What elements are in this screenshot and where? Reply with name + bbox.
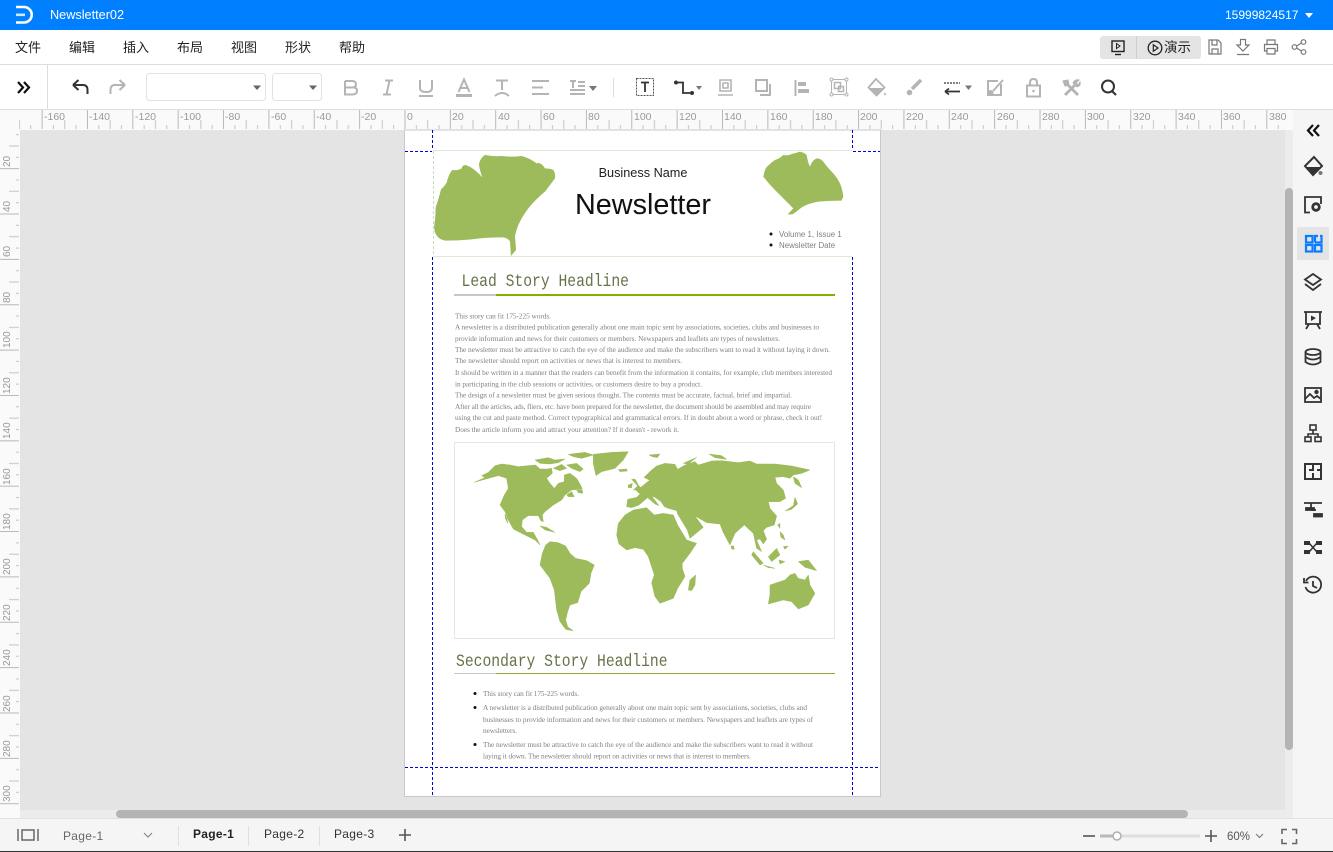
toolbar divider: [48, 65, 614, 109]
icon: add page: [399, 829, 411, 841]
icon: fill bucket: [1305, 157, 1322, 175]
ruler labels: 300: [2, 785, 13, 802]
ruler labels: 160: [770, 111, 788, 123]
uk and ireland: [628, 479, 642, 490]
lead story body: This story can fit 175-225 words.: [455, 311, 551, 320]
lead story body: Does the article inform you and attract your attention? If it doesn't - rework it.: [455, 425, 679, 434]
icon: align shapes: [796, 80, 809, 96]
issue details: Volume 1, Issue 1: [779, 230, 842, 239]
tab: page 2: Page-2: [264, 827, 304, 841]
ruler labels: 220: [906, 111, 924, 123]
iceland: [618, 469, 627, 472]
icon: text box: [636, 78, 654, 96]
icon: symbol library: [1306, 236, 1322, 252]
document name: Newsletter02: [50, 8, 124, 22]
tab divider: [248, 826, 249, 846]
sumatra and java: [752, 552, 775, 568]
icon: line spacing: [570, 81, 597, 94]
ruler labels: 360: [1223, 111, 1241, 123]
scrollbar thumb: [116, 810, 1188, 818]
header band: [433, 150, 852, 256]
icon: mind map: [1304, 541, 1322, 554]
ruler labels: 280: [1042, 111, 1060, 123]
icon: connector: [674, 80, 702, 95]
icon: tools: [1063, 80, 1080, 95]
ruler labels: 80: [588, 111, 600, 123]
icon: group: [830, 78, 848, 96]
ruler labels: 200: [860, 111, 878, 123]
icon: floor plan: [1305, 464, 1321, 479]
ruler labels: 140: [2, 422, 13, 439]
horizontal scrollbar: [20, 810, 1285, 818]
icon: undo: [73, 80, 88, 94]
menu: view: 视图: [231, 40, 257, 55]
left ruler: [0, 130, 20, 818]
ruler labels: -100: [180, 111, 201, 123]
title bar: [0, 0, 1333, 30]
icon: page settings: [1305, 197, 1321, 212]
ruler labels: 60: [2, 245, 13, 257]
madagascar: [688, 575, 696, 591]
menu: file: 文件: [15, 40, 41, 55]
ruler labels: -80: [225, 111, 240, 123]
icon: font colour: [456, 80, 472, 97]
icon: collapse chevrons: [1308, 125, 1319, 136]
icon: redo: [110, 80, 125, 94]
ruler labels: 100: [2, 331, 13, 348]
lead story body: After all the articles, ads, fliers, etc. have been prepared for the newsletter, the document should be assembled and may require: [455, 402, 811, 411]
ruler labels: 40: [2, 200, 13, 212]
ruler labels: 120: [679, 111, 697, 123]
ruler labels: 260: [2, 695, 13, 712]
ruler labels: 140: [724, 111, 742, 123]
ruler labels: 20: [452, 111, 464, 123]
top ruler: [0, 110, 1293, 130]
icon: zoom in: [1205, 830, 1217, 842]
tab: page 3: Page-3: [334, 827, 374, 841]
font size select: [272, 74, 322, 100]
icon: fullscreen: [1282, 830, 1296, 844]
secondary headline: Secondary Story Headline: [456, 652, 668, 671]
lead story body: provide information and news for their customers or members. Newspapers and leaflets are types of newsletters.: [455, 334, 780, 343]
south america: [540, 542, 594, 631]
zoom percentage: 60%: [1227, 831, 1250, 843]
icon: text style: [495, 80, 509, 96]
zoom slider: [1100, 832, 1200, 840]
menu: help: 帮助: [339, 40, 365, 55]
icon: zoom out: [1083, 835, 1095, 837]
new guinea: [798, 560, 817, 571]
menu bar: [0, 30, 1333, 65]
icon: database: [1306, 349, 1320, 364]
tab divider: [178, 826, 179, 846]
baja california: [505, 514, 508, 523]
lead headline rule: [454, 294, 835, 296]
borneo and sulawesi: [768, 546, 788, 564]
icon: org chart: [1305, 425, 1321, 442]
japan and sakhalin: [785, 477, 802, 511]
scrollbar thumb: [1285, 188, 1293, 750]
tab divider: [319, 826, 320, 846]
lead story body: The newsletter must be attractive to catch the eye of the audience and make the subscribers want to read it without laying it down.: [455, 345, 830, 354]
ruler labels: 120: [2, 377, 13, 394]
ruler labels: -60: [271, 111, 286, 123]
world map: [474, 452, 817, 631]
icon: app logo: [16, 6, 34, 24]
issue details: [770, 230, 842, 250]
icon: align: [532, 81, 549, 94]
icon: page panel: [17, 829, 39, 841]
icon: fill bucket: [868, 79, 886, 96]
icon: line style: [944, 83, 972, 94]
ruler labels: 260: [997, 111, 1015, 123]
toolbar icons: [17, 65, 1117, 109]
africa: [617, 508, 697, 603]
ruler labels: -20: [361, 111, 376, 123]
toolbar: [0, 65, 1333, 110]
eurasia: [627, 461, 810, 552]
issue details: Newsletter Date: [779, 241, 836, 250]
ruler labels: 200: [2, 558, 13, 575]
zoom controls: [1083, 828, 1298, 844]
greenland: [593, 452, 628, 476]
icon: duplicate: [756, 80, 770, 95]
secondary bullet list: businesses to provide information and news for their customers or members. Newspapers and leaflets are types of: [483, 715, 814, 724]
ruler labels: [2, 155, 13, 802]
secondary bullet list: This story can fit 175-225 words.: [483, 689, 579, 698]
icon: bold: [345, 81, 357, 94]
secondary bullet list: newsletters.: [483, 726, 517, 735]
button divider: [1136, 36, 1137, 59]
icon: layers: [1305, 274, 1321, 290]
secondary bullet list: [474, 689, 814, 760]
ruler labels: -40: [316, 111, 331, 123]
icon: italic: [383, 80, 393, 94]
ruler labels: 40: [498, 111, 510, 123]
icon: underline: [419, 80, 433, 96]
icon: right ginkgo leaf: [763, 152, 843, 214]
ruler labels: -160: [44, 111, 65, 123]
presentation button group: [1100, 36, 1201, 59]
ruler labels: 240: [951, 111, 969, 123]
ruler labels: 180: [815, 111, 833, 123]
taiwan and philippines: [778, 523, 785, 540]
sri lanka: [731, 546, 734, 549]
lead story body: A newsletter is a distributed publication generally about one main topic sent by associations, societies, clubs and businesses to: [455, 322, 819, 332]
icon: expand chevrons: [18, 82, 29, 93]
lead story body: The design of a newsletter must be given serious thought. The contents must be accurate, factual, brief and impartial.: [455, 390, 792, 400]
bottom edge: [0, 851, 1333, 852]
icon: slideshow screen: [1111, 40, 1125, 56]
icon: lock: [1027, 79, 1040, 96]
menu: edit: 编辑: [69, 40, 95, 55]
ruler labels: 380: [1269, 111, 1287, 123]
icon: share: [1292, 39, 1306, 55]
menu: shape: 形状: [285, 40, 311, 55]
icon: left ginkgo leaf: [434, 155, 555, 256]
page guide lines: [405, 130, 880, 796]
icon: print: [1264, 39, 1278, 55]
lead story body: The newsletter should report on activities or news that is interest to members.: [455, 356, 682, 365]
icon: selector chevron: [144, 832, 152, 838]
ruler labels: 0: [407, 111, 413, 123]
icon: image: [1305, 388, 1321, 402]
lead story body: in participating in the club sessions or activities, or customers desire to buy a product.: [455, 380, 702, 388]
lead headline: Lead Story Headline: [462, 272, 629, 291]
ruler labels: 300: [1087, 111, 1105, 123]
icon: account caret: [1305, 13, 1313, 18]
icon: edit shape: [988, 80, 1003, 96]
menu: layout: 布局: [177, 40, 203, 55]
page sheet: [404, 130, 880, 796]
ruler labels: 20: [2, 155, 13, 167]
icon: gantt: [1304, 503, 1322, 516]
icon: search: [1102, 80, 1116, 95]
ruler labels: 240: [2, 649, 13, 666]
sidebar icons: [1303, 124, 1324, 594]
current page selector: Page-1: [63, 829, 104, 843]
arctic islands: [535, 452, 593, 472]
secondary bullet list: The newsletter must be attractive to catch the eye of the audience and make the subscribers want to read it without: [483, 740, 813, 749]
lead story body: It should be written in a manner that the readers can benefit from the information it contains, for example, club members interested: [455, 368, 832, 377]
north america: [474, 464, 582, 545]
ruler labels: 340: [1178, 111, 1196, 123]
icon: save: [1208, 39, 1222, 55]
icon: bring to front: [718, 80, 733, 95]
newfoundland and nova scotia: [567, 490, 583, 497]
australia: [768, 573, 815, 609]
icon: history: [1304, 577, 1321, 593]
ruler labels: 100: [634, 111, 652, 123]
ruler labels: 160: [2, 468, 13, 485]
bottom bar: [0, 818, 1333, 851]
icon: play circle: [1148, 40, 1162, 56]
font family select: [146, 74, 266, 100]
cuba and caribbean: [540, 526, 555, 532]
menu: insert: 插入: [123, 40, 149, 55]
world map panel: [454, 442, 834, 638]
ruler labels: 320: [1133, 111, 1151, 123]
secondary headline rule: [454, 673, 835, 674]
present label: 演示: [1164, 40, 1191, 55]
active item highlight: [1297, 227, 1329, 260]
lead story body: using the cut and paste method. Correct typographical and grammatical errors. If in doubt about a word or phrase, check it out!: [455, 413, 822, 422]
ruler labels: 180: [2, 513, 13, 530]
right sidebar: [1293, 110, 1333, 818]
tab: page 1 active: Page-1: [193, 827, 234, 841]
lead story body: [455, 311, 832, 434]
secondary bullet list: laying it down. The newsletter should report on activities or news that is interest to members.: [483, 752, 751, 760]
newsletter title: Newsletter: [575, 189, 711, 221]
icon: download: [1236, 38, 1250, 56]
ruler labels: 220: [2, 604, 13, 621]
ruler labels: [44, 111, 1287, 123]
secondary bullet list: A newsletter is a distributed publication generally about one main topic sent by associations, societies, clubs and: [483, 703, 807, 712]
ruler labels: -120: [135, 111, 156, 123]
polar islands: [649, 454, 727, 464]
ruler labels: 60: [543, 111, 555, 123]
icon: brush: [907, 80, 921, 95]
ruler labels: 80: [2, 291, 13, 303]
ruler labels: -140: [89, 111, 110, 123]
user account: 15999824517: [1225, 8, 1298, 22]
icon: presentation board: [1304, 312, 1322, 329]
business name: Business Name: [599, 166, 687, 180]
lead story: [454, 272, 835, 434]
icon: zoom chevron: [1256, 834, 1263, 838]
ruler labels: 280: [2, 740, 13, 757]
secondary story: [454, 652, 835, 760]
vertical scrollbar: [1285, 130, 1293, 818]
